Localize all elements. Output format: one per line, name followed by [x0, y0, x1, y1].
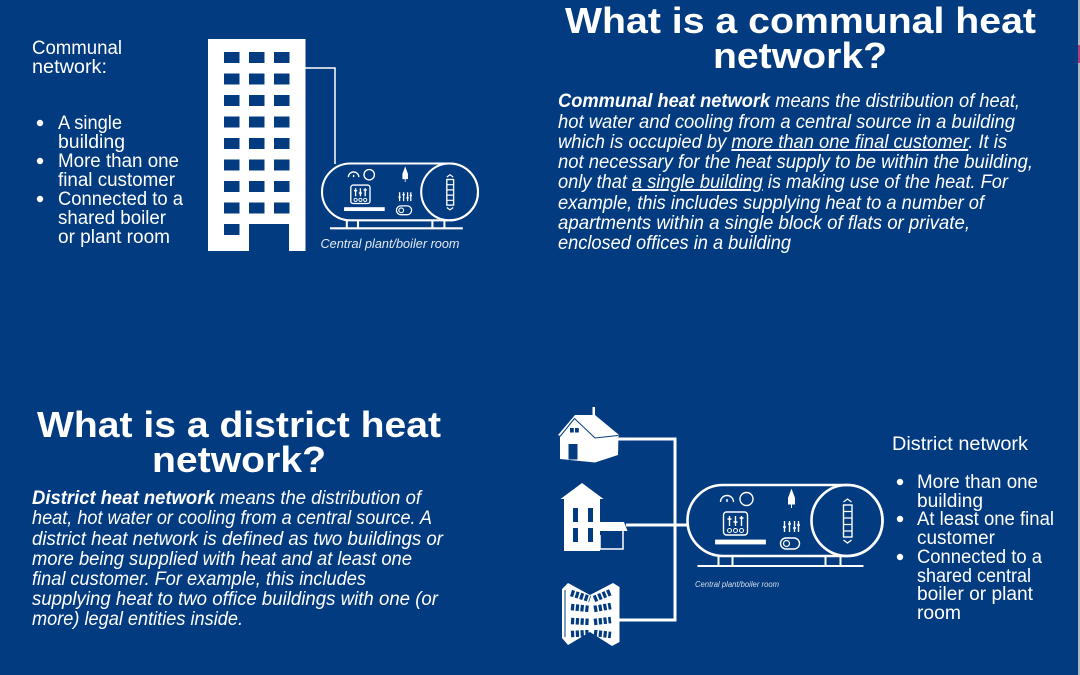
bullet list: communal characteristics: or plant room	[58, 227, 170, 248]
bullet list: communal characteristics: building	[58, 132, 125, 153]
label: communal boiler room caption: Central plant/boiler room	[320, 237, 460, 251]
text block: district definition: more) legal entities inside.	[32, 608, 243, 630]
text block: district definition: heat, hot water or cooling from a central source. A	[32, 507, 432, 529]
text block: district definition: supplying heat to two office buildings with one (or	[32, 588, 439, 610]
heading: district heat network: network?	[152, 439, 326, 480]
text block: communal definition: only that a single building is making use of the heat. For	[558, 171, 1009, 193]
pipe: tower to boiler	[305, 68, 335, 164]
text block: communal definition: hot water and cooling from a central source in a building	[558, 111, 1015, 133]
icon: apartment tower	[208, 39, 306, 251]
label: district boiler room caption: Central plant/boiler room	[695, 580, 779, 589]
bullet list: district characteristics: room	[917, 603, 961, 624]
icon: terraced house with annex	[560, 483, 628, 551]
bullet list: district characteristics: shared central	[917, 566, 1031, 587]
text block: communal definition: apartments within a single block of flats or private,	[558, 212, 970, 234]
bullet list: district characteristics: boiler or plant	[917, 584, 1034, 605]
bullet list: communal characteristics	[37, 113, 183, 248]
bullet list: communal characteristics: More than one	[58, 151, 179, 172]
bullet list: communal characteristics: A single	[58, 113, 122, 134]
text block: communal definition: example, this includes supplying heat to a number of	[558, 192, 986, 214]
bullet list: district characteristics: At least one final	[917, 509, 1054, 530]
text block: district definition: final customer. For example, this includes	[32, 568, 366, 590]
text block: communal definition	[558, 90, 1033, 254]
text block: communal definition: Communal heat network means the distribution of heat,	[558, 90, 1020, 112]
text block: communal definition: which is occupied by more than one final customer. It is	[558, 131, 1007, 153]
text block: district definition: more being supplied with heat and at least one	[32, 548, 412, 570]
panel: communal heat network definition	[558, 0, 1036, 254]
icon: detached house	[558, 407, 618, 462]
pipes: district network	[617, 439, 688, 620]
heading: communal heat network: What is a communal heat	[565, 0, 1036, 41]
bullet list: district characteristics: Connected to a	[917, 547, 1042, 568]
bullet list: communal characteristics: final customer	[58, 170, 176, 191]
bullet list: district characteristics: building	[917, 491, 983, 512]
text block: district definition	[32, 487, 444, 630]
bullet list: district characteristics: customer	[917, 528, 996, 549]
heading: communal network: network:	[32, 57, 107, 78]
heading: district network: District network	[892, 434, 1029, 455]
heading: communal network	[32, 38, 122, 78]
heading: district heat network	[37, 404, 441, 480]
icon: folded office block	[562, 583, 620, 646]
panel: district heat network definition	[32, 404, 444, 630]
icon: communal central boiler	[322, 164, 478, 228]
icon: district central boiler	[688, 485, 882, 566]
bullet list: communal characteristics: shared boiler	[58, 208, 167, 229]
bullet list: district characteristics	[897, 472, 1054, 624]
text block: communal definition: enclosed offices in a building	[558, 232, 791, 254]
bullet list: district characteristics: More than one	[917, 472, 1038, 493]
heading: communal heat network: network?	[713, 35, 887, 76]
panel: district network list	[892, 434, 1054, 624]
panel: communal network list	[32, 38, 183, 248]
text block: district definition: district heat network is defined as two buildings or	[32, 528, 444, 550]
heading: district heat network: What is a district heat	[37, 404, 441, 445]
text block: district definition: District heat network means the distribution of	[32, 487, 423, 509]
heading: communal network: Communal	[32, 38, 122, 59]
heading: communal heat network	[565, 0, 1036, 76]
bullet list: communal characteristics: Connected to a	[58, 189, 183, 210]
text block: communal definition: not necessary for the heat supply to be within the building,	[558, 151, 1033, 173]
